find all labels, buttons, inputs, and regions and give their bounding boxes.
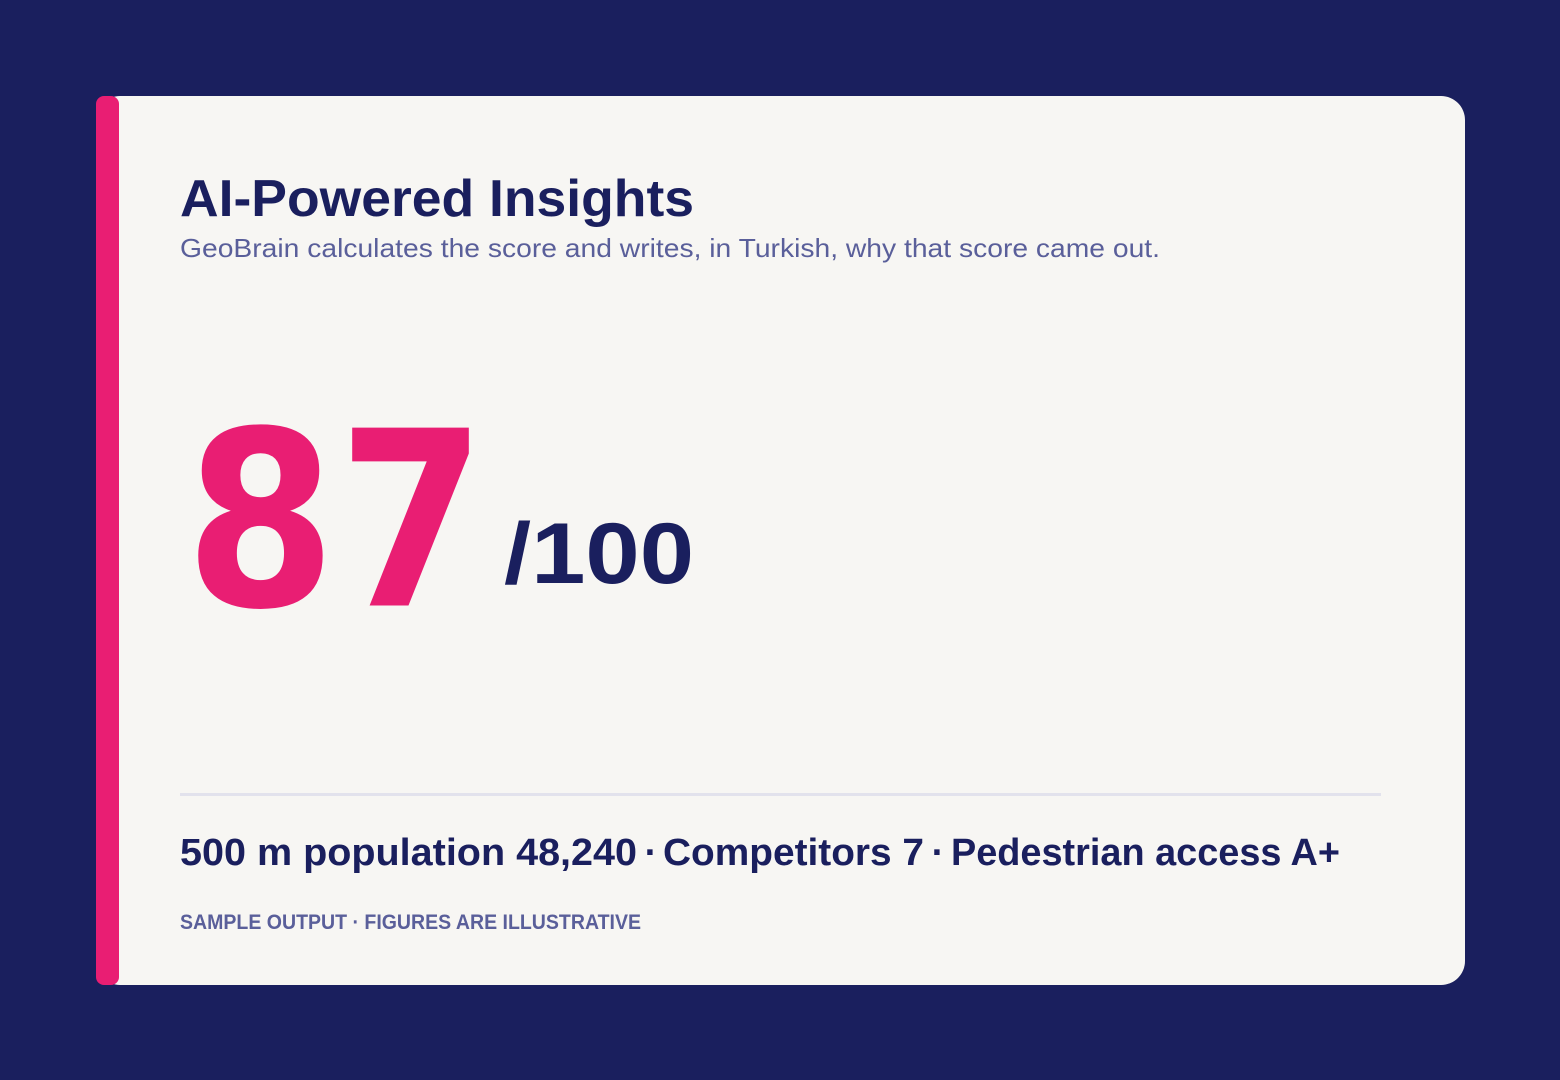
score denominator: /100 xyxy=(504,506,694,602)
title: AI-Powered Insights xyxy=(180,170,694,228)
key statistics: Competitors 7 xyxy=(663,832,924,874)
accent bar xyxy=(96,96,119,985)
score value: 7 xyxy=(338,379,486,663)
score value xyxy=(185,379,486,664)
key statistics: · xyxy=(645,832,657,874)
sample output note: SAMPLE OUTPUT · FIGURES ARE ILLUSTRATIVE xyxy=(180,911,641,934)
panel: insight card xyxy=(96,96,1465,985)
key statistics: · xyxy=(932,832,944,874)
key statistics: 500 m population 48,240 xyxy=(180,832,637,874)
subtitle: GeoBrain calculates the score and writes, in Turkish, why that score came out. xyxy=(180,233,1160,263)
score value: 8 xyxy=(185,380,336,664)
key statistics xyxy=(180,832,1340,874)
key statistics: Pedestrian access A+ xyxy=(951,832,1340,874)
